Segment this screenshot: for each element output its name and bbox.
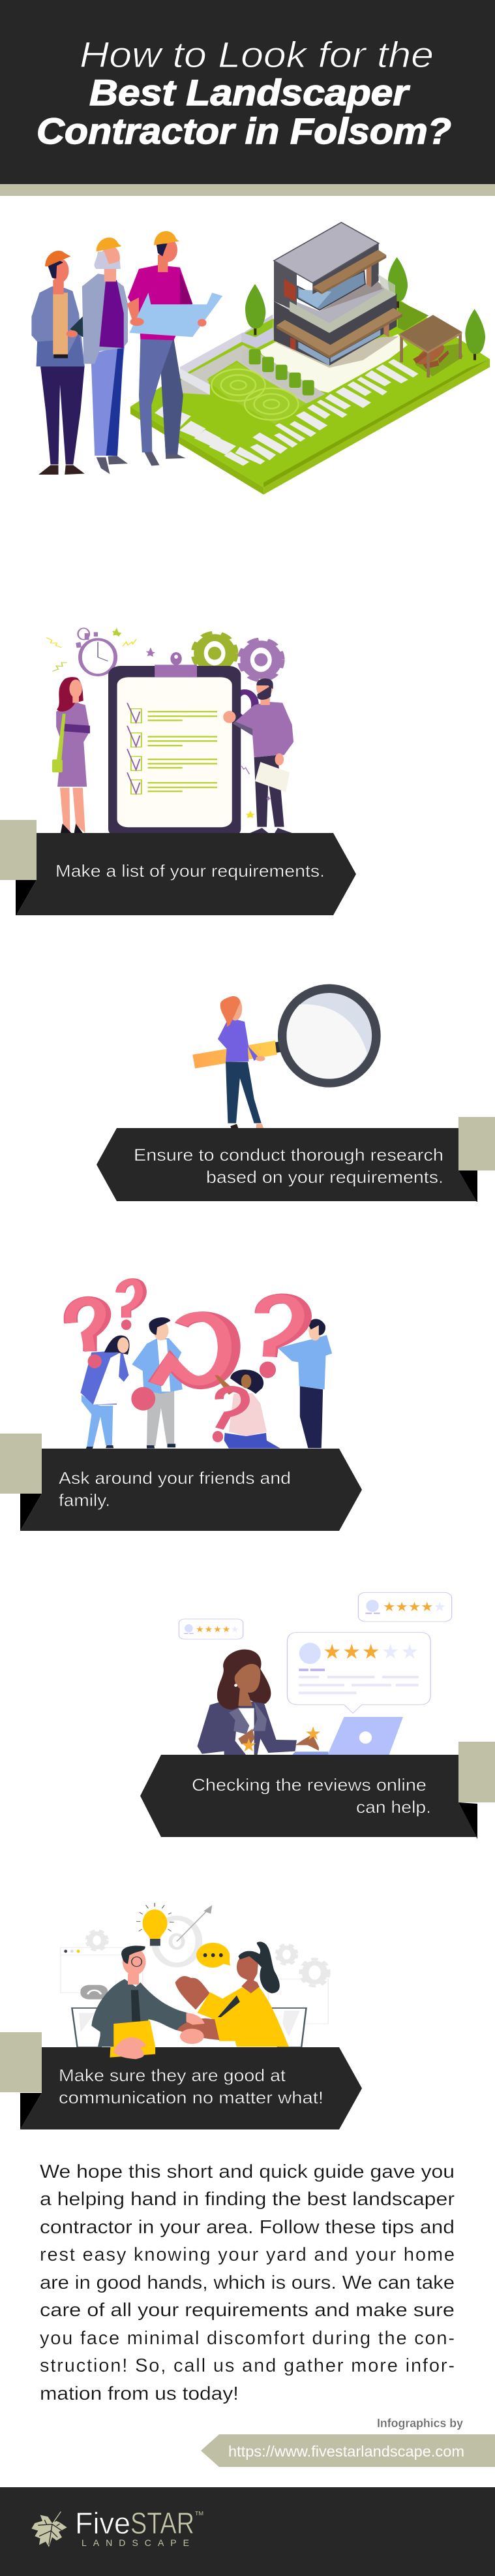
step 2 text: Ensure to conduct thorough research [134, 1145, 443, 1165]
icon: laptop [292, 1717, 403, 1755]
header panel [0, 0, 495, 196]
woman reviewer [198, 1650, 320, 1755]
step 2 text [134, 1145, 443, 1187]
icon: gears [193, 633, 282, 718]
hedge bushes [249, 349, 314, 396]
kneeling person [213, 1370, 280, 1449]
step 1 text: Make a list of your requirements. [55, 861, 325, 881]
closing paragraph: a helping hand in finding the best landscaper [40, 2189, 455, 2210]
icon: target and arrow [155, 1905, 212, 1965]
house, courtyard, stones, trees and pergola [241, 223, 485, 460]
closing paragraph: contractor in your area. Follow these tips and [40, 2217, 455, 2238]
step 3 text [59, 1468, 291, 1510]
woman [52, 677, 90, 833]
title: Best Landscaper [89, 72, 410, 113]
big question mark centre [131, 1317, 233, 1411]
step 4 banner [140, 1742, 495, 1839]
woman from behind [218, 996, 265, 1128]
step 2 text: based on your requirements. [206, 1167, 443, 1187]
lawn and left garden [130, 300, 490, 495]
planter [241, 315, 274, 348]
step 5 text: Make sure they are good at [59, 2066, 286, 2085]
tree right [465, 309, 485, 360]
closing paragraph: mation from us today! [40, 2383, 239, 2404]
folder and hand overlapping banner [110, 2037, 155, 2059]
step 4 text: can help. [356, 1797, 431, 1817]
step 5 text: communication no matter what! [59, 2088, 323, 2107]
contractor 1 [31, 251, 108, 475]
contractor 3 with blueprint [127, 231, 222, 465]
man with thumbs up [223, 678, 293, 833]
step 2 illustration: magnifying glass [192, 984, 381, 1128]
review speech bubble [287, 1632, 430, 1713]
closing paragraph: care of all your requirements and make sure [40, 2300, 455, 2321]
step 4 text [192, 1775, 431, 1817]
logo: FiveStar Landscape [31, 2506, 203, 2548]
checklist rows [127, 703, 142, 794]
icon: speech bubble with dots [196, 1943, 230, 1968]
house [274, 223, 402, 366]
clipboard [108, 652, 241, 838]
step 4 text: Checking the reviews online [192, 1775, 427, 1795]
tree behind house [388, 257, 408, 308]
wordmark: Five [75, 2506, 130, 2540]
icon: light bulb [136, 1903, 174, 1946]
title: Contractor in Folsom? [37, 110, 451, 151]
step 1 illustration: checklist [46, 628, 293, 838]
website banner [201, 2434, 495, 2467]
sparks [46, 638, 136, 671]
paving stones [250, 359, 419, 460]
closing paragraph: are in good hands, which is ours. We can take [40, 2272, 455, 2293]
title: How to Look for the [80, 34, 434, 75]
magnifier [192, 984, 381, 1088]
logo: FiveStar Landscape: LANDSCAPE [82, 2537, 189, 2548]
step 1 banner [0, 820, 356, 915]
step 3 illustration: question marks and friends [70, 1281, 332, 1449]
person left [80, 1336, 130, 1449]
review card top right [358, 1592, 452, 1622]
closing paragraph: rest easy knowing your yard and your home [40, 2244, 455, 2265]
footer panel [0, 2487, 495, 2576]
question mark right and person [260, 1298, 332, 1448]
icon: phone badge [80, 1985, 108, 2000]
contractors [31, 231, 222, 475]
closing paragraph: struction! So, call us and gather more infor- [40, 2355, 455, 2376]
hero illustration: contractors and landscaped house [31, 223, 490, 495]
step 2 banner [97, 1117, 495, 1202]
step 3 text: Ask around your friends and [59, 1468, 291, 1488]
icon: maple leaf [31, 2511, 67, 2547]
step 3 banner [0, 1434, 362, 1531]
title [37, 34, 451, 151]
website url: https://www.fivestarlandscape.com [228, 2443, 464, 2460]
step 3 text: family. [59, 1490, 110, 1510]
closing paragraph [40, 2161, 455, 2404]
man with folder [91, 1945, 188, 2047]
closing paragraph: you face minimal discomfort during the con- [40, 2328, 455, 2349]
tree left [245, 284, 265, 335]
step 5 banner [0, 2032, 362, 2129]
step 5 text [59, 2066, 323, 2107]
review card small [179, 1619, 243, 1639]
woman handshake [175, 1941, 289, 2047]
logo: FiveStar Landscape: STAR [130, 2506, 194, 2540]
pergola [400, 315, 463, 377]
person centre [132, 1317, 183, 1449]
question marks left [70, 1281, 142, 1351]
icon: stopwatch [76, 628, 155, 675]
logo: FiveStar Landscape: TM [195, 2511, 203, 2517]
step 4 illustration: online reviews [179, 1592, 452, 1755]
closing paragraph: We hope this short and quick guide gave you [40, 2161, 455, 2182]
laptops [72, 2008, 306, 2047]
background elements [61, 1930, 329, 2024]
step 5 illustration: handshake [61, 1903, 329, 2047]
infographics credit: Infographics by [377, 2417, 463, 2430]
contractor 2 [82, 238, 128, 474]
